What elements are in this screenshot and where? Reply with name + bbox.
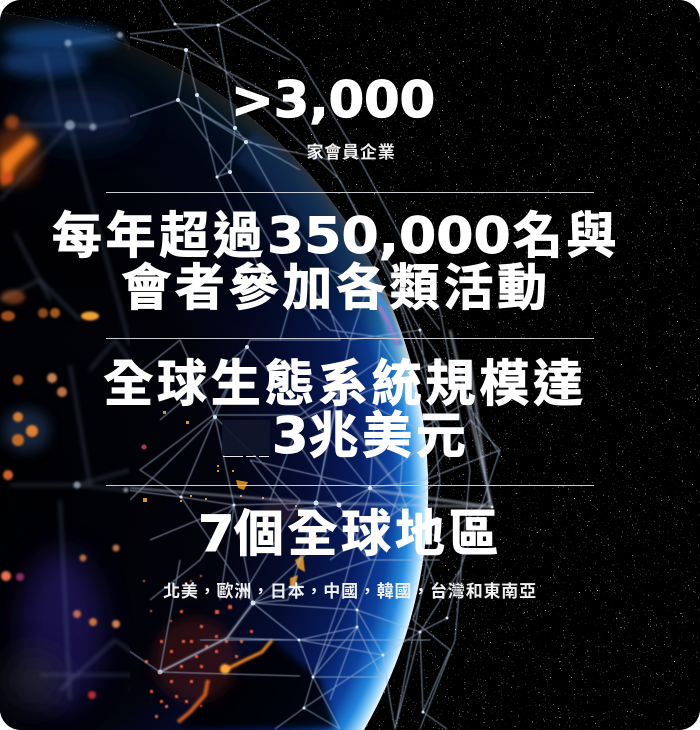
stat: annual attendance: 每年超過 名與 [52, 208, 620, 264]
continent city lights, centre and bottom [142, 411, 317, 722]
dark patch with dashes [222, 420, 270, 456]
stat: annual attendance: 會者參加各類活動 [121, 260, 551, 316]
caption: 家會員企業 [306, 143, 396, 162]
regions list: 北美，歐洲，日本，中國，韓國，台灣和東南亞 [163, 582, 537, 601]
network mesh, blurred left side [0, 32, 130, 700]
network nodes [64, 22, 494, 714]
bright network bands [130, 330, 492, 672]
stat: ecosystem size: 兆美元 [308, 408, 470, 464]
stat: ecosystem size [103, 356, 587, 465]
stat: global regions: 個全球地區 [234, 506, 502, 562]
stat: annual attendance [52, 207, 620, 316]
number >3,000: >3,000 [231, 71, 435, 129]
stat: global regions: 7 [198, 505, 234, 563]
stat: ecosystem size: 全球生態系統規模達 [103, 356, 587, 412]
stat: annual attendance: 350,000 [267, 207, 510, 265]
globe [0, 13, 428, 730]
stat: >3,000 member companies [231, 71, 435, 162]
blurred clouds and city lights, left [0, 25, 140, 710]
network mesh, sharp lines [130, 0, 502, 730]
stat: ecosystem size: 3 [272, 407, 309, 465]
